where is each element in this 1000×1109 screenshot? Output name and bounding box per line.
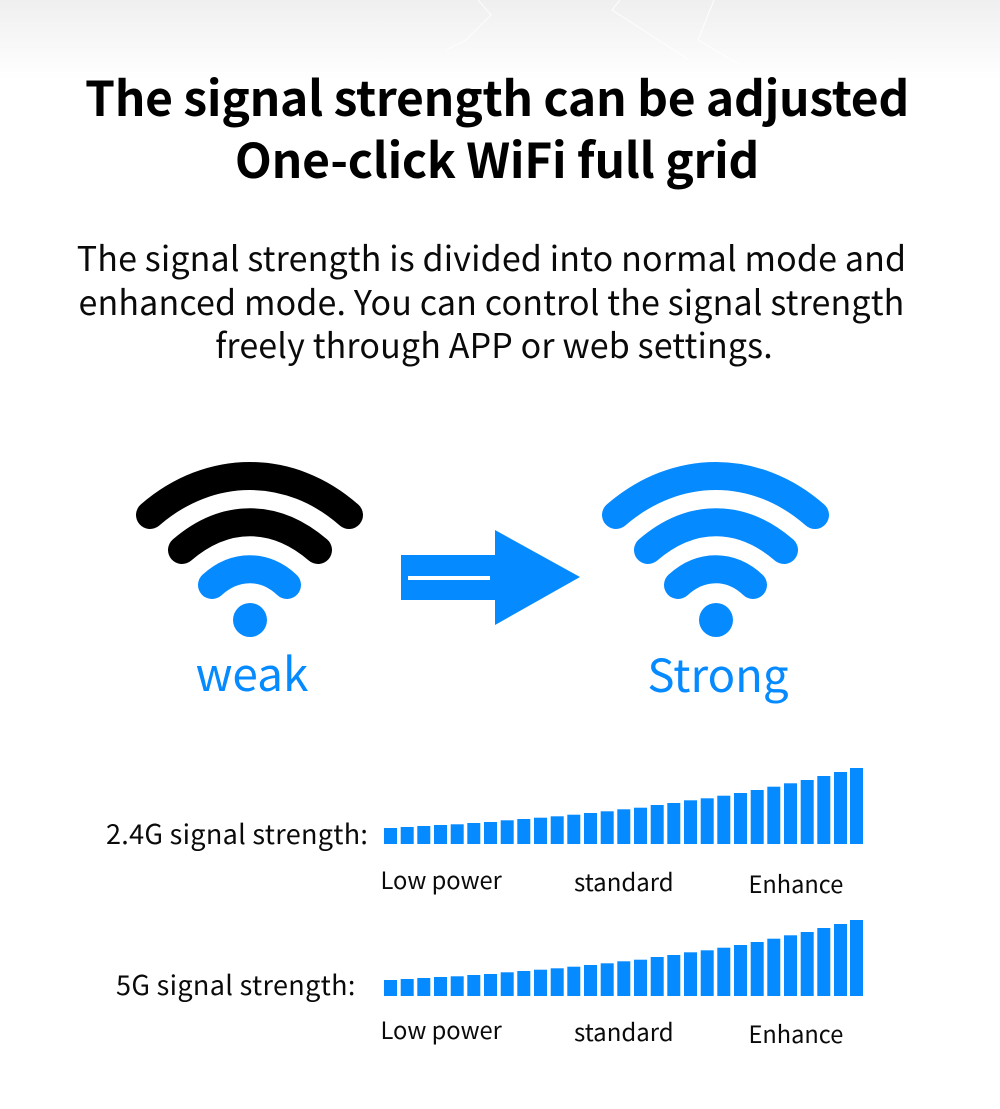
scale labels: 5G: Enhance xyxy=(748,1016,843,1050)
scale labels: 5G: Low power xyxy=(380,1012,502,1046)
title: One-click WiFi full grid xyxy=(235,122,759,192)
label: weak: weak xyxy=(196,639,308,705)
arrow xyxy=(401,530,580,625)
label: 5G signal strength: 5G signal strength: xyxy=(116,964,356,1003)
description text xyxy=(77,232,906,368)
bar chart: 5G xyxy=(384,920,863,996)
scale labels: 5G: standard xyxy=(574,1013,674,1048)
scale labels: 2.4G: standard xyxy=(574,863,674,898)
label: 2.4G signal strength: 2.4G signal strength: xyxy=(106,813,368,852)
description text: freely through APP or web settings. xyxy=(215,319,773,368)
title: The signal strength can be adjusted xyxy=(85,60,909,130)
label: Strong: Strong xyxy=(647,640,789,706)
icon: weak wifi xyxy=(136,462,363,637)
icon: strong wifi xyxy=(602,462,829,637)
title xyxy=(85,60,909,192)
scale labels: 2.4G: Low power xyxy=(380,862,502,896)
description text: The signal strength is divided into normal mode and xyxy=(77,232,906,281)
top background band xyxy=(0,0,1000,40)
scale labels: 2.4G xyxy=(380,862,843,900)
description text: enhanced mode. You can control the signal strength xyxy=(79,276,904,325)
scale labels: 2.4G: Enhance xyxy=(748,866,843,900)
scale labels: 5G xyxy=(380,1012,843,1050)
bar chart: 2.4G xyxy=(384,768,863,844)
